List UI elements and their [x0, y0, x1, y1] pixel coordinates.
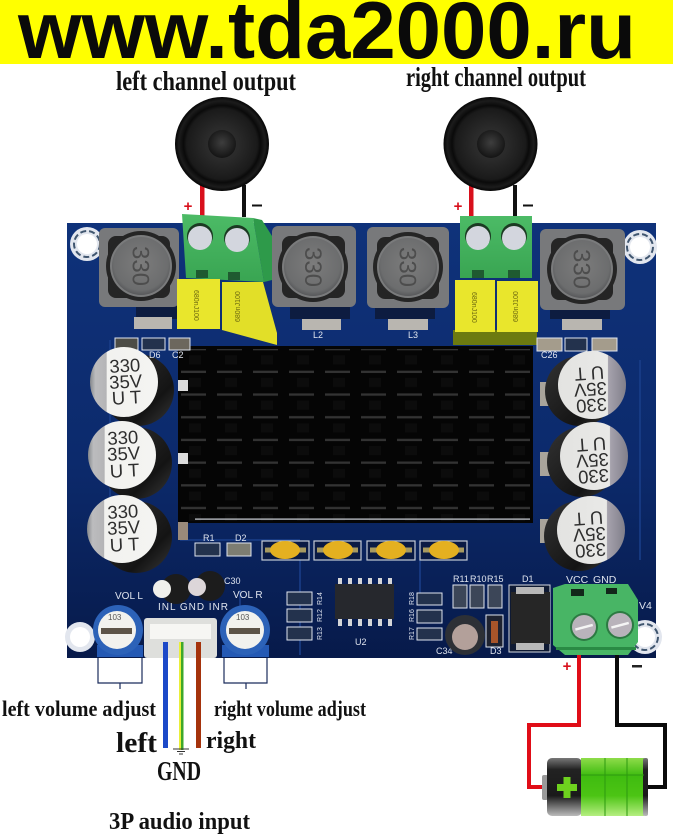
left electrolytic capacitors: 35V [107, 442, 141, 465]
silkscreen labels: D6 [149, 350, 161, 360]
banner [0, 0, 673, 76]
right potentiometer [220, 605, 270, 657]
label: left volume adjust: left volume adjust [2, 696, 157, 721]
audio wires [163, 642, 201, 750]
audio connector [144, 618, 217, 658]
label: 3P audio input: 3P audio input [109, 809, 250, 835]
silkscreen labels [115, 330, 652, 656]
silkscreen labels: VOL L [115, 591, 143, 602]
silkscreen labels: R11 [453, 574, 469, 584]
left electrolytic capacitors [87, 347, 188, 573]
power plus and minus marks [563, 658, 642, 675]
silkscreen labels: R18 [409, 592, 416, 605]
electrolytic C34 [445, 615, 485, 655]
silkscreen labels: V4 [639, 600, 652, 612]
label: left: left [116, 728, 158, 759]
inductor 4 [540, 229, 625, 330]
icon: left speaker [175, 97, 269, 191]
label: GND: GND [157, 756, 201, 786]
right electrolytic capacitors [540, 351, 628, 571]
yellow film capacitors [177, 279, 538, 345]
right electrolytic capacitors: U T [574, 362, 605, 385]
inductor 1: 330 [126, 246, 154, 286]
label: left channel output: left channel output [116, 66, 296, 96]
right output terminal [460, 216, 532, 278]
left electrolytic capacitors: 330 [109, 354, 141, 377]
label: right: right [206, 728, 256, 754]
silkscreen labels: GND [593, 574, 617, 586]
silkscreen labels: U2 [355, 637, 367, 647]
inductor 3: 330 [394, 247, 420, 287]
IC U2 [335, 578, 394, 626]
left electrolytic capacitors: 35V [107, 516, 141, 539]
speaker wires right: + [454, 198, 463, 215]
right electrolytic capacitors: U T [573, 507, 604, 530]
silkscreen labels: R12 [317, 609, 324, 622]
silkscreen labels: INL GND INR [158, 602, 228, 613]
silkscreen labels: R10 [470, 574, 487, 584]
speaker wires left: + [184, 198, 193, 215]
silkscreen labels: VOL R [233, 590, 263, 601]
right electrolytic capacitors: 35V [572, 523, 607, 546]
label: right volume adjust: right volume adjust [214, 696, 367, 721]
right electrolytic capacitors: 330 [574, 539, 607, 562]
right potentiometer: 103 [236, 613, 250, 622]
left electrolytic capacitors: U T [109, 459, 140, 482]
right electrolytic capacitors: 35V [575, 449, 610, 472]
silkscreen labels: R15 [487, 574, 504, 584]
label: right channel output: right channel output [406, 62, 586, 92]
inductor 4: 330 [568, 249, 594, 289]
left output terminal [182, 214, 272, 282]
silkscreen labels: D2 [235, 533, 247, 543]
silkscreen labels: L2 [313, 330, 323, 340]
mounting holes [65, 227, 662, 654]
power wires [529, 655, 665, 787]
inductor 1 [99, 228, 179, 329]
silkscreen labels: C2 [172, 350, 184, 360]
left potentiometer: 103 [108, 613, 122, 622]
power terminal [553, 584, 638, 655]
left electrolytic capacitors: 330 [107, 500, 139, 523]
silkscreen labels: R1 [203, 533, 215, 543]
icon: battery [542, 758, 648, 816]
small input capacitors [153, 571, 225, 604]
left potentiometer [93, 605, 143, 657]
yellow film capacitors: 680nJ100 [235, 291, 242, 322]
right electrolytic capacitors: 330 [575, 394, 608, 417]
silkscreen labels: VCC [566, 574, 589, 586]
speaker wires left [184, 185, 262, 217]
heatsink [178, 346, 533, 523]
silkscreen labels: R16 [409, 609, 416, 622]
yellow film capacitors: 680nJ100 [513, 291, 520, 322]
icon: ground symbol [173, 749, 189, 754]
silkscreen labels: C30 [224, 576, 241, 586]
right electrolytic capacitors: 330 [577, 465, 610, 488]
left electrolytic capacitors: U T [111, 386, 142, 409]
silkscreen labels: D1 [522, 574, 534, 584]
inductor 3 [367, 227, 449, 330]
SMD parts [195, 543, 503, 647]
silkscreen labels: D3 [490, 646, 502, 656]
inductor 2: 330 [299, 247, 326, 287]
power plus and minus marks: + [563, 658, 572, 675]
speaker wires right [454, 185, 533, 217]
silkscreen labels: R17 [409, 627, 416, 640]
volume brackets [98, 658, 267, 689]
diode D1 [509, 585, 550, 652]
silkscreen labels: R14 [317, 592, 324, 605]
left electrolytic capacitors: 35V [109, 370, 143, 393]
yellow film capacitors: 680nJ100 [192, 290, 199, 321]
right electrolytic capacitors: U T [576, 433, 607, 456]
silkscreen labels: L3 [408, 330, 418, 340]
left electrolytic capacitors: 330 [107, 426, 139, 449]
right electrolytic capacitors: 35V [573, 378, 608, 401]
silkscreen labels: C34 [436, 646, 453, 656]
ceramic capacitors [262, 541, 467, 560]
amplifier board [65, 214, 662, 658]
diode D3 body [491, 621, 498, 643]
silkscreen labels: C26 [541, 350, 558, 360]
left electrolytic capacitors: U T [109, 533, 140, 556]
silkscreen labels: R13 [317, 627, 324, 640]
SMD row above capacitors [115, 338, 617, 351]
inductor 2 [272, 226, 356, 330]
icon: right speaker [444, 97, 538, 191]
yellow film capacitors: 680nJ100 [470, 292, 477, 323]
